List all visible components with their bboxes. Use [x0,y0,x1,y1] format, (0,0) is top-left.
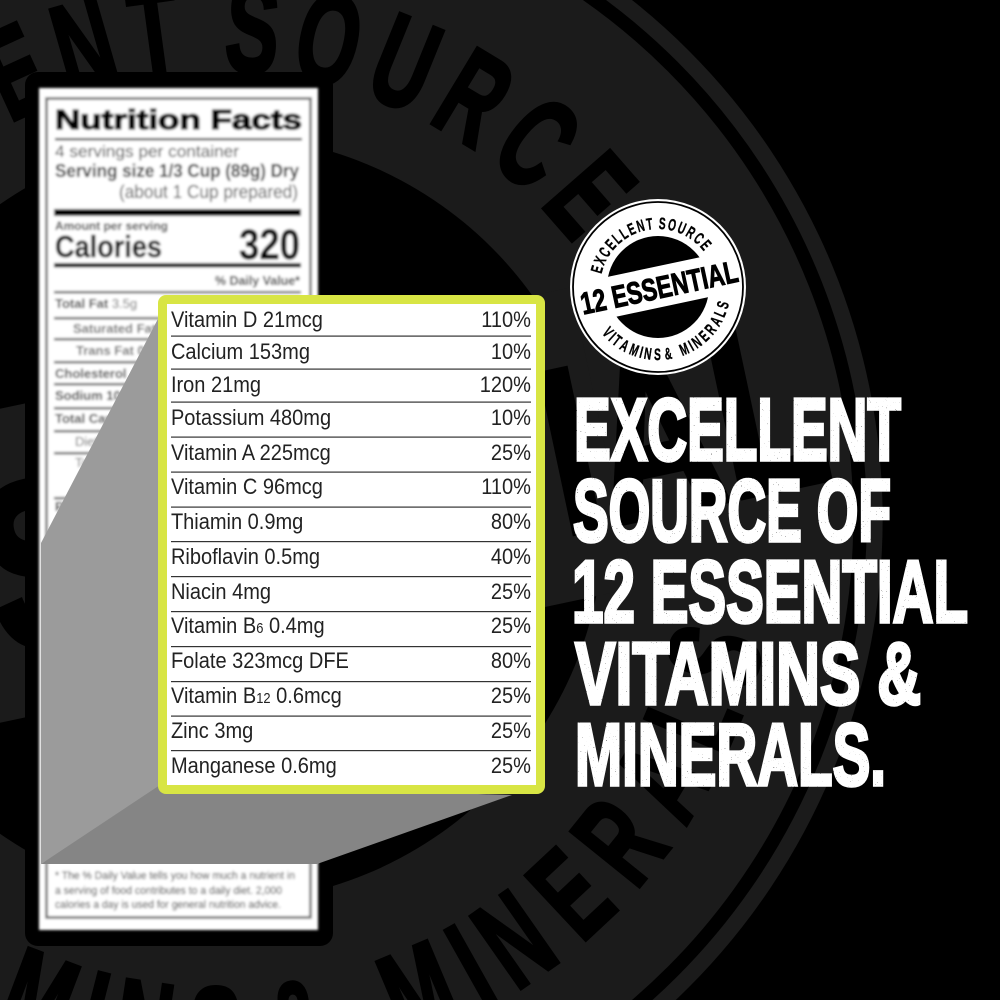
callout wedge: dark side [41,785,512,864]
blurred nutrition facts label: Saturated Fat [73,321,157,336]
blurred nutrition facts label: a serving of food contributes to a daily diet. 2,000 [55,885,282,897]
label black frame [25,72,333,946]
badge: 12 essential seal: L [609,230,625,247]
row separators [171,336,531,751]
panel: vitamins and minerals table [158,295,545,794]
badge: 12 essential seal: C [690,229,708,248]
nutrient names: Manganese 0.6mg [171,753,337,778]
badge: 12 essential seal: M [677,339,692,359]
badge: 12 essential seal: I [638,343,645,362]
badge: 12 essential seal: A [617,336,632,355]
badge: 12 essential seal: R [683,223,699,242]
blurred nutrition facts label: Trans Fat 0g [76,343,153,358]
badge: 12 essential seal: S [658,215,666,233]
panel: nutrition label [25,72,333,946]
nutrient names: Vitamin B12 0.6mcg [171,683,342,708]
daily value percentages: 25% [491,718,531,743]
blurred nutrition facts label: Nutrition Facts [55,104,302,135]
daily value percentages: 80% [491,509,531,534]
daily value percentages: 10% [491,339,531,364]
badge: 12 essential seal: S [714,299,733,311]
badge: 12 essential seal: I [605,329,619,344]
blurred nutrition facts label: Amount per serving [55,219,168,233]
nutrient names: Vitamin B6 0.4mg [171,613,325,638]
badge: 12 essential seal: V [599,324,617,341]
blurred nutrition facts label: (about 1 Cup prepared) [119,182,298,202]
badge: 12 essential seal: R [701,321,720,338]
daily value percentages: 80% [491,648,531,673]
nutrient names: Zinc 3mg [171,718,253,743]
nutrient names: Vitamin A 225mcg [171,440,331,465]
daily value percentages: 25% [491,440,531,465]
daily value percentages [480,307,531,778]
badge: 12 essential seal: M [627,340,641,360]
daily value percentages: 40% [491,544,531,569]
blurred nutrition facts label [39,88,318,930]
blurred nutrition facts label: Sodium 10mg [55,388,140,403]
badge: 12 essential seal: U [675,219,689,238]
badge: 12 essential seal: E [602,236,620,253]
blurred nutrition facts label: Dietary [75,434,117,449]
daily value percentages: 110% [481,307,531,332]
badge: 12 essential seal: E [588,264,607,275]
background seal watermark: A [586,719,738,841]
daily value percentages: 25% [491,613,531,638]
blurred nutrition facts label: Calories [55,229,162,264]
blurred nutrition facts label: Total Fat 3.5g [55,296,137,311]
badge: 12 essential seal: T [609,332,625,350]
background seal watermark: E [503,824,639,964]
daily value percentages: 25% [491,753,531,778]
nutrient names: Calcium 153mg [171,339,310,364]
table yellow frame [158,295,545,794]
nutrient names: Niacin 4mg [171,579,271,604]
badge: 12 essential seal [570,199,746,375]
nutrient names: Riboflavin 0.5mg [171,544,320,569]
blurred nutrition facts label: 320 [239,221,300,269]
badge: 12 essential seal: E [697,237,715,254]
table white body [167,304,536,785]
badge: 12 essential seal: L [711,307,730,320]
nutrient names: Vitamin D 21mcg [171,307,323,332]
badge: 12 essential seal: A [707,314,726,329]
background seal watermark: C [469,70,605,216]
badge: 12 essential seal: O [666,215,678,235]
badge: 12 essential seal: 12 ESSENTIAL [577,254,741,322]
blurred nutrition facts label: Serving size 1/3 Cup (89g) Dry [55,161,299,181]
daily value percentages: 10% [491,405,531,430]
blurred nutrition facts label: calories a day is used for general nutrition advice. [55,899,281,911]
badge: 12 essential seal: S [654,346,661,364]
badge: 12 essential seal: I [685,337,697,355]
blurred nutrition facts label: Cholesterol [55,366,127,381]
daily value percentages: 25% [491,683,531,708]
daily value percentages: 120% [480,372,531,397]
blurred nutrition facts label: 4 servings per container [55,142,239,161]
badge: 12 essential seal: T [645,215,654,234]
daily value percentages: 110% [481,474,531,499]
badge: 12 essential seal: L [616,224,631,243]
badge: 12 essential seal: N [689,333,705,352]
background seal watermark: E [519,128,661,262]
blurred nutrition facts label: * The % Daily Value tells you how much a nutrient in [55,870,295,882]
blurred nutrition facts label: Total Carb [55,411,118,426]
nutrient names: Potassium 480mg [171,405,331,430]
badge: 12 essential seal: N [643,344,653,363]
nutrient names: Iron 21mg [171,372,261,397]
badge: 12 essential seal: X [591,253,610,268]
background seal watermark: L [618,669,768,769]
nutrient names [171,307,349,778]
blurred nutrition facts label: Total [75,455,103,470]
badge: 12 essential seal: & [663,344,673,363]
badge: 12 essential seal: E [696,327,713,345]
badge: 12 essential seal: E [625,220,638,239]
callout wedge: light side [41,315,160,864]
nutrient names: Vitamin C 96mcg [171,474,323,499]
background seal watermark: R [413,22,536,174]
blurred nutrition facts label: % Daily Value* [215,274,300,288]
nutrient names: Folate 323mcg DFE [171,648,349,673]
background seal watermark: R [546,774,693,909]
background seal watermark: S [639,612,791,701]
badge: 12 essential seal: N [634,216,647,236]
nutrient names: Thiamin 0.9mg [171,509,303,534]
blurred nutrition facts label: Protein [55,499,100,514]
headline [572,380,968,804]
badge: 12 essential seal: C [595,244,614,260]
daily value percentages: 25% [491,579,531,604]
